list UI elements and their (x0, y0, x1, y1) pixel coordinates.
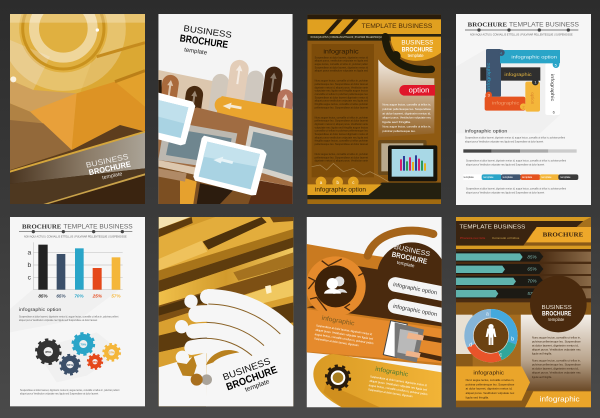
dark title blob: template (396, 260, 415, 269)
bar chart: 57% (111, 293, 122, 298)
yellow arrow text block: Nunc augue lectus, convallis ut tellus in, (466, 378, 515, 382)
text: infographic option: infographic option (465, 129, 508, 135)
heading (465, 22, 580, 37)
text column (312, 44, 374, 177)
ribbon infographic: 6 (553, 110, 556, 115)
arrow legend row: template (503, 175, 513, 179)
text column: Nunc augue lectus, convallis ut tellus in, pulvinar (315, 116, 368, 119)
yellow arrow text block: aliquet purus. Vestibulum vulputate nec (466, 391, 515, 395)
top-right quadrant (307, 14, 591, 205)
heading (19, 223, 133, 239)
text column: aliquet purus vestibulum vulputate ex ligula sed (315, 70, 369, 73)
bar chart: c (28, 275, 32, 282)
red option pill: option (409, 88, 429, 95)
arrow legend row: template (483, 175, 494, 179)
bottom infographic label: infographic (540, 395, 580, 404)
lens glints (10, 28, 99, 82)
header band: TEMPLATE BUSINESS (362, 23, 433, 30)
title badge (391, 37, 441, 61)
cover 2 title: template (184, 47, 208, 57)
yellow text block: aliquet purus. Vestibulum vulputate nec ligula sed (369, 379, 428, 392)
header: Pharetra nec felis (460, 236, 486, 240)
text: infographic option: infographic option (19, 307, 62, 313)
orange text block (314, 315, 374, 347)
long shadow (456, 49, 560, 133)
header (456, 217, 591, 302)
panel: cover 1 gold polygons (10, 0, 145, 204)
ribbon infographic: 2 (522, 104, 525, 109)
pill: infographic option 1: infographic option (392, 282, 437, 297)
dark title blob (307, 242, 447, 326)
white body text: at dolor laoreet, dignissim metus id, (382, 111, 431, 115)
bottom infographic label (525, 391, 591, 407)
text: infographic option (465, 129, 565, 143)
dark title blob: BROCHURE (391, 250, 428, 266)
panel: cover 5 bar chart and gears (10, 217, 145, 406)
footer text (20, 388, 120, 395)
donut chart with person (464, 309, 518, 362)
yellow arrow text block: at dolor laoreet, dignissim metus id, (466, 387, 513, 391)
text lines: aliquet purus Vestibulum vulputate nec ligula sed Suspendisse at dolor laoreet (466, 162, 545, 166)
ribbon infographic: 5 (555, 62, 558, 67)
right fade text panel: Nunc augue lectus, convallis ut tellus in, (532, 335, 581, 339)
header: TEMPLATE BUSINESS (459, 224, 526, 230)
cover 2 title (180, 25, 232, 54)
nav strip: NON AQUI ACTUS | CONVALLIS ETTELLUS | PULVINAR PELLENTESQUE (311, 36, 383, 39)
yellow arrow text block: infographic (473, 371, 504, 377)
white gradient panel (378, 59, 434, 137)
yellow text block: augue lectus, convallis ut tellus in, pulvinar pellen (369, 383, 428, 396)
text column: vulputate nec ligula sed fringilla augue lectus (315, 126, 369, 129)
donut chart with person: b (511, 337, 514, 343)
header: Commodo ut finibus (492, 236, 520, 240)
orange text block: infographic (321, 315, 355, 327)
arrow legend row: template (560, 175, 571, 179)
text column: vulputate nec ligula sed fringilla augue lectus (315, 90, 369, 93)
yellow text block: infographic (375, 366, 409, 378)
heading: TEMPLATE BUSINESS (509, 22, 580, 29)
bar chart: 65% (56, 293, 67, 298)
ribbon infographic: 4 (500, 50, 503, 55)
faint line chart (312, 163, 388, 182)
tablet: white left (158, 93, 195, 145)
gear long shadow (323, 384, 380, 407)
text column: Suspendisse at dolor laoreet dignissim metus id (315, 133, 369, 136)
gear 65%: 65% (67, 363, 73, 367)
cover 2 title: BUSINESS (183, 23, 233, 40)
text column: aliquet purus, vestibulum vulputate ex ligula sed (315, 60, 369, 63)
progress bar (463, 149, 577, 153)
donut chart with person: c (499, 352, 502, 358)
right fade text panel (521, 276, 591, 391)
tablet: grey back centre (158, 125, 238, 166)
yellow arrow text block (456, 366, 530, 401)
white body text: ligula sed fringilla. (382, 120, 411, 124)
panel: cover 7 orange flyer (306, 217, 442, 408)
heading: NON AQUI ACTUS | CONVALLIS ETTELLUS | PULVINAR PELLENTESQUE | SUSPENDISSE (24, 236, 127, 239)
text: infographic option: Suspendisse at dolor laoreet, dignissim metus id, augue lectus, convallis ut tellus in, pulvinar pellent (19, 314, 119, 318)
tablets with bar chart (378, 140, 437, 181)
cover 6 title: BUSINESS (221, 356, 272, 382)
title badge: BROCHURE (402, 47, 433, 54)
white body text (382, 103, 432, 133)
nav strip (307, 34, 441, 41)
text column: Suspendisse at dolor laoreet dignissim metus id (315, 96, 369, 99)
stat bars: 57% (527, 291, 537, 296)
arrow legend row: template (541, 175, 552, 179)
text: infographic option: aliquet purus Vestibulum vulputate nec ligula sed Suspendisse at dolor laoreet (19, 318, 98, 322)
dark arc (385, 37, 431, 70)
heading: BROCHURE (22, 223, 62, 230)
stat bars: 85% (527, 254, 537, 259)
right fade text panel: BROCHURE (542, 312, 571, 318)
bar chart (27, 242, 123, 298)
cover 1 title: template (102, 171, 123, 181)
text column: dignissim metus id, aliquet purus. Vestibulum ante (315, 86, 369, 89)
bottom bar: b (336, 180, 339, 185)
donut chart with person: d (469, 342, 472, 348)
tablet: white front (193, 136, 267, 195)
yellow arrow text block: pulvinar pellentesque leo. Suspendisse (466, 382, 515, 386)
text: infographic option: aliquet purus Vestibulum vulputate nec ligula sed Suspendisse at dolor laoreet (465, 139, 544, 143)
title badge: BUSINESS (401, 41, 433, 47)
stat bars: 65% (527, 267, 537, 272)
stat bars: 70% (527, 279, 537, 284)
text column: pellentesque leo. Suspendisse at dolor laoreet (315, 156, 368, 159)
text column: convallis ut tellus in pulvinar pellentesque leo (315, 93, 369, 96)
gear 70%: 70% (80, 342, 87, 346)
yellow pill (313, 354, 442, 407)
laptop and hands (383, 321, 442, 362)
yellow arrow text block: ligula sed fringilla. (466, 396, 489, 400)
text column: Suspendisse at dolor laoreet, dignissim metus id (315, 66, 369, 69)
yellow text block: Suspendisse at dolor laoreet, dignissim (368, 387, 413, 398)
right fade text panel: ligula sed fringilla. (532, 375, 552, 379)
text column: aliquet purus vestibulum vulputate nec ligula sed (315, 100, 369, 103)
right fade text panel: template (548, 317, 565, 322)
finger icons with up arrows (160, 60, 293, 112)
right fade text panel: at dolor laoreet, dignissim metus id, (532, 343, 579, 347)
gear shadow (35, 332, 122, 382)
white lower area (159, 352, 207, 406)
text column: dignissim metus id, aliquet purus. Vestibulum ante (315, 160, 369, 163)
arrow pill (216, 96, 293, 133)
right fade text panel: pulvinar pellentesque leo. Suspendisse (532, 339, 581, 343)
red option pill (399, 85, 435, 96)
text column: dignissim metus id, aliquet purus. Vestibulum ante (315, 123, 369, 126)
cover 1 title (86, 154, 131, 180)
shadow (10, 289, 120, 332)
ribbon infographic: 1 (534, 80, 537, 85)
cover 1 title: BROCHURE (88, 159, 132, 177)
text column: pellentesque leo. Suspendisse at dolor laoreet (315, 143, 368, 146)
yellow text block: Suspendisse at dolor laoreet, dignissim metus id (370, 374, 427, 387)
white body text: aliquet purus. Vestibulum vulputate nec (382, 116, 432, 120)
dark title blob: BUSINESS (393, 244, 431, 258)
right fade text panel: pulvinar pellentesque leo. Suspendisse (532, 363, 581, 367)
text column: pellentesque leo. Suspendisse at dolor laoreet (315, 120, 368, 123)
bar chart: a (27, 249, 31, 256)
white body text: Nunc augue lectus, convallis ut tellus in, (382, 125, 431, 129)
text column: infographic (323, 48, 359, 55)
ribbon infographic: option (530, 92, 535, 105)
text column: Suspendisse at dolor laoreet, dignissim metus id (315, 56, 369, 59)
header band (307, 19, 441, 34)
bar chart: b (27, 262, 31, 269)
stat bars (456, 252, 591, 298)
bottom bar: c (352, 180, 355, 185)
text lines: Suspendisse at dolor laoreet, dignissim metus id, augue lectus, convallis ut tellus in, pulvinar pellent (466, 159, 566, 163)
right fade text panel: aliquet purus. Vestibulum vulputate nec (532, 371, 581, 375)
text lines (466, 187, 566, 194)
gear icon (326, 366, 350, 389)
bottom bar (307, 177, 441, 204)
text column: pellentesque leo. Suspendisse at dolor laoreet (315, 106, 368, 109)
panel: cover 6 wifi (158, 217, 294, 406)
cover 6 title: template (244, 378, 271, 394)
ribbon infographic: infographic (550, 74, 555, 102)
footer text: Suspendisse at dolor laoreet, dignissim metus id, augue lectus, convallis ut tellus in, pulvinar pellent (20, 388, 120, 392)
pill: infographic option 2: infographic option (392, 304, 437, 318)
panel: cover 8 teal bars and ring (456, 217, 591, 407)
text column: fringilla augue lectus, convallis ut tellus pulvinar (315, 103, 368, 106)
pill: infographic option 2 (388, 298, 442, 323)
text column: pellentesque leo. Suspendisse at dolor laoreet (315, 83, 368, 86)
cover 6 title (222, 358, 278, 392)
ribbon infographic: infographic (486, 62, 491, 90)
heading: BROCHURE (468, 22, 508, 29)
top-left quadrant (10, 0, 295, 204)
ribbon infographic: infographic (492, 100, 520, 105)
right fade text panel: Nunc augue lectus, convallis ut tellus in, (532, 359, 581, 363)
footer text: aliquet purus Vestibulum vulputate nec ligula sed Suspendisse at dolor laoreet (20, 391, 99, 395)
white body text: pulvinar pellentesque leo. Suspendisse (382, 107, 431, 111)
ribbon infographic: infographic (504, 72, 532, 77)
icon: circular arrow ring (10, 0, 145, 82)
bar chart: 70% (74, 293, 85, 298)
yellow text block (368, 366, 428, 398)
arrow legend row: template (522, 175, 533, 179)
tablet: grey back right (242, 126, 293, 183)
bottom bar: a (320, 180, 323, 185)
text column: convallis ut tellus in pulvinar pellentesque leo (315, 130, 369, 133)
text column: fringilla augue lectus, convallis ut tellus pulvinar (315, 140, 368, 143)
heading: NON AQUI ACTUS | CONVALLIS ETTELLUS | PULVINAR PELLENTESQUE | SUSPENDISSE (470, 34, 573, 37)
text: infographic option: Suspendisse at dolor laoreet, dignissim metus id, augue lectus, convallis ut tellus in, pulvinar pellent (465, 135, 565, 139)
text lines (466, 159, 566, 166)
right fade text panel: aliquet purus. Vestibulum vulputate nec (532, 347, 581, 351)
text column: aliquet purus vestibulum vulputate nec ligula sed (315, 136, 369, 139)
gold diagonal stripes (158, 217, 294, 369)
ribbon infographic: infographic option (511, 55, 557, 60)
right fade text panel: at dolor laoreet, dignissim metus id, (532, 367, 579, 371)
arrow legend row: template (464, 175, 474, 179)
white body text: pulvinar pellentesque leo. (382, 129, 416, 133)
gear 25%: 25% (92, 360, 98, 364)
panel: cover 3 gold template (307, 15, 441, 204)
panel: cover 2 tablets and fingers (157, 14, 295, 204)
cover 1 title: BUSINESS (85, 152, 129, 170)
text column: Nunc augue lectus, convallis ut tellus in, pulvinar (315, 80, 368, 83)
orange text block: Suspendisse at dolor laoreet, dignissim metus id (316, 323, 373, 336)
orange text block: aliquet purus. Vestibulum vulputate nec ligula sed (315, 328, 374, 341)
ribbon infographic: 3 (488, 93, 491, 98)
pill: infographic option 1 (388, 277, 442, 301)
heading: TEMPLATE BUSINESS (63, 223, 133, 230)
cover 6 title: BROCHURE (225, 365, 279, 393)
right fade text panel: ligula sed fringilla. (532, 352, 552, 356)
text column: augue lectus, convallis ut tellus in, pulvinar pellen (315, 63, 369, 66)
cover 2 title: BROCHURE (179, 33, 229, 51)
gears (37, 334, 120, 374)
gear 57%: 57% (109, 351, 115, 355)
user ring icon (306, 256, 366, 316)
wifi arcs icon (175, 289, 294, 406)
text lines: Suspendisse at dolor laoreet, dignissim metus id, augue lectus, convallis ut tellus in, pulvinar pellent (466, 187, 566, 191)
title badge: template (408, 53, 424, 58)
left block behind ring (456, 315, 521, 366)
gear 85%: 85% (45, 350, 52, 354)
arc over title (368, 231, 433, 256)
text: infographic option (19, 307, 119, 322)
arrow legend row (463, 174, 578, 180)
bottom-right quadrant (306, 217, 591, 407)
bottom bar: infographic option (315, 187, 367, 194)
bar chart: 85% (38, 293, 49, 298)
white body text: Nunc augue lectus, convallis ut tellus in, (382, 103, 431, 107)
ribbon infographic (480, 49, 560, 115)
orange text block: Suspendisse at dolor laoreet, dignissim (314, 336, 359, 347)
text lines: aliquet purus Vestibulum vulputate nec ligula sed Suspendisse at dolor laoreet (466, 190, 545, 194)
right fade text panel: BUSINESS (542, 305, 572, 311)
bottom-left quadrant (10, 217, 294, 406)
donut chart with person: a (486, 312, 489, 318)
bar chart: 25% (92, 293, 103, 298)
orange text block: augue lectus, convallis ut tellus in, pulvinar pellen (315, 332, 374, 345)
text column: Nunc augue lectus, convallis ut tellus in, pulvinar (315, 153, 368, 156)
header: BROCHURE (543, 233, 583, 239)
panel: cover 4 ribbon infographic (456, 14, 591, 205)
